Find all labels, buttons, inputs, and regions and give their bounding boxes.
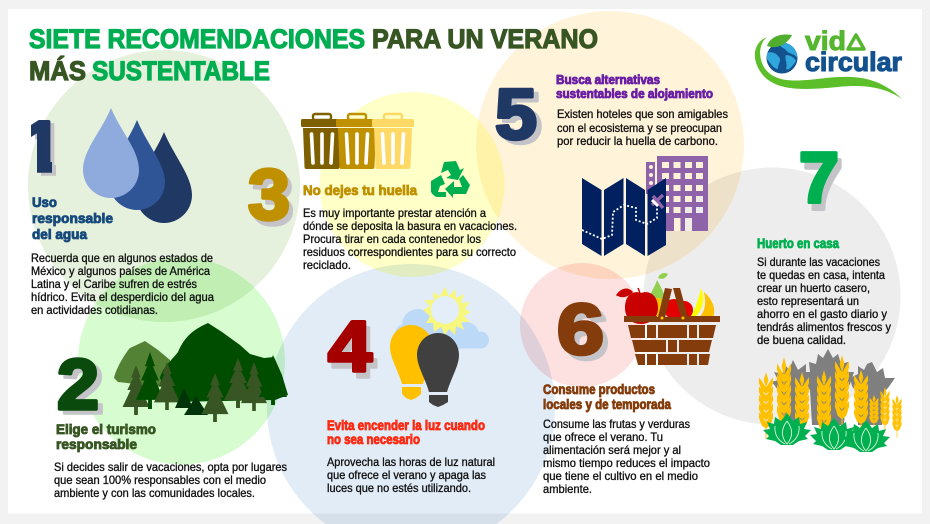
heading: Elige el turismo (56, 422, 156, 437)
body text: en actividades cotidianas. (31, 303, 158, 317)
circle: panel 6 background (520, 263, 644, 387)
icon: water drops (83, 108, 192, 223)
logo wordmark: circular (805, 47, 902, 77)
number 7: 7 (799, 139, 839, 218)
heading: locales y de temporada (543, 397, 671, 412)
panel 1: water (22, 108, 214, 317)
icon: hotel building (646, 156, 708, 231)
number 4: 4 (328, 308, 373, 387)
body text: que sean 100% responsables con el medio (54, 473, 266, 487)
body text: residuos correspondientes para su correcto (303, 245, 516, 259)
circle: panel 4 background (267, 264, 555, 524)
heading (556, 73, 713, 101)
panel 2: tourism (54, 323, 288, 500)
icon: folded map (582, 178, 666, 256)
body text (31, 251, 214, 317)
heading: no sea necesario (327, 432, 420, 447)
body text: Si durante las vacaciones (757, 255, 880, 269)
title (29, 24, 598, 86)
heading: Consume productos (543, 382, 655, 397)
panel 7: home garden (757, 139, 902, 452)
body text: Existen hoteles que son amigables (557, 107, 728, 121)
body text (303, 206, 517, 272)
panel 4: light (327, 287, 495, 495)
body text (543, 417, 710, 496)
logo wordmark: vid (805, 26, 846, 56)
panel 6: local produce (543, 273, 720, 496)
number 7: 7 (803, 146, 843, 225)
body text: hídrico. Evita el desperdicio del agua (31, 290, 214, 304)
body text: Es muy importante prestar atención a (303, 206, 486, 220)
title: MÁS (29, 55, 86, 86)
heading: responsable (56, 437, 137, 452)
icon: recycling symbol (431, 161, 470, 198)
heading: Uso (32, 195, 57, 210)
number 6: 6 (557, 291, 604, 370)
title: SUSTENTABLE (92, 56, 270, 86)
number 6: 6 (562, 296, 609, 375)
icon: sun (423, 287, 471, 335)
logo globe (766, 42, 798, 74)
number 3: 3 (248, 156, 290, 235)
logo leaf (767, 34, 792, 47)
body text: que ofrece el verano y apaga las (327, 468, 486, 482)
heading: Huerto en casa (757, 236, 839, 251)
body text: luces que no estés utilizando. (327, 481, 471, 495)
number 2: 2 (62, 350, 104, 429)
heading (543, 382, 671, 412)
circle: panel 2 background (78, 258, 285, 464)
body text (557, 107, 728, 148)
heading: No dejes tu huella (303, 183, 417, 198)
logo wordmark (805, 26, 902, 77)
body text: alimentación será mejor y al (543, 443, 681, 457)
number 2: 2 (57, 346, 99, 425)
heading: del agua (32, 227, 87, 242)
body text: por reducir la huella de carbono. (557, 134, 718, 148)
logo: Vida Circular (755, 26, 902, 99)
icon: cloud (396, 309, 489, 348)
body text: tendrás alimentos frescos y (757, 320, 891, 334)
body text: crear un huerto casero, (757, 281, 870, 295)
heading (327, 418, 485, 447)
icon: trash cans (301, 114, 414, 169)
number 1: 1 (26, 111, 66, 190)
number 1 (31, 120, 56, 176)
body text: ambiente y con las comunidades locales. (54, 486, 255, 500)
body text: mismo tiempo reduces el impacto (543, 456, 710, 470)
body text: ahorro en el gasto diario y (757, 307, 887, 321)
circle: panel 3 background (320, 92, 504, 277)
logo swoosh (755, 37, 902, 99)
icon: wheat field (759, 349, 902, 452)
circle: panel 7 background (644, 168, 900, 424)
icon: fruit basket (617, 273, 720, 365)
body text (54, 460, 287, 500)
title: PARA UN VERANO (372, 24, 598, 54)
number 4: 4 (332, 314, 377, 393)
body text: con el ecosistema y se preocupan (557, 121, 722, 135)
body text: Latina y el Caribe sufren de estrés (31, 277, 197, 291)
body text (327, 455, 495, 495)
number 5: 5 (500, 80, 542, 159)
body text: México y algunos países de América (31, 264, 210, 278)
body text: ambiente. (543, 482, 592, 496)
heading: Busca alternativas (556, 73, 660, 87)
panel 3: waste (248, 114, 517, 272)
body text: esto representará un (757, 294, 859, 308)
panel 5: lodging (495, 73, 728, 256)
heading (32, 195, 113, 242)
body text: te quedas en casa, intenta (757, 268, 885, 282)
circle: panel 5 background (476, 11, 744, 279)
number 3: 3 (252, 161, 294, 240)
heading: sustentables de alojamiento (556, 87, 713, 101)
heading (56, 422, 156, 452)
heading: Evita encender la luz cuando (327, 418, 485, 433)
body text: Procura tirar en cada contenedor los (303, 232, 481, 246)
icon: mountains and trees (114, 323, 288, 422)
body text: que tiene el cultivo en el medio (543, 469, 698, 483)
body text: Aprovecha las horas de luz natural (327, 455, 495, 469)
body text: que ofrece el verano. Tu (543, 430, 663, 444)
number 5: 5 (495, 76, 537, 155)
body text: reciclado. (303, 258, 351, 272)
heading: responsable (32, 211, 113, 226)
number 1: 1 (22, 108, 62, 187)
body text: Recuerda que en algunos estados de (31, 251, 213, 265)
body text (757, 255, 891, 347)
title: SIETE RECOMENDACIONES (29, 24, 365, 54)
circle: panel 1 background (28, 50, 300, 322)
body text: Si decides salir de vacaciones, opta por lugares (54, 460, 287, 474)
icon: dark bulb (417, 333, 459, 407)
body text: dónde se deposita la basura en vacaciones. (303, 219, 517, 233)
icon: yellow bulb (390, 325, 433, 400)
body text: de buena calidad. (757, 333, 846, 347)
body text: Consume las frutas y verduras (543, 417, 690, 431)
